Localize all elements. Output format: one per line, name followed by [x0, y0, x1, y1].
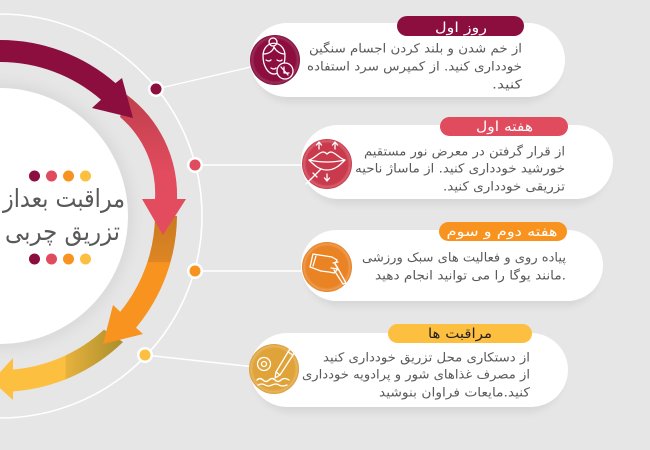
text block: از دستکاری محل تزریق خودداری کنید — [323, 350, 530, 366]
text block — [302, 350, 530, 400]
ring node: red — [187, 157, 203, 173]
icon: pen and eye — [249, 344, 299, 394]
outer ring — [0, 14, 202, 418]
panel: first day — [250, 16, 565, 102]
text block: از قرار گرفتن در معرض نور مستقیم — [364, 144, 565, 160]
ring node: orange — [187, 263, 203, 279]
text block — [355, 144, 566, 194]
heading pill — [439, 222, 567, 241]
panel: first week — [301, 117, 613, 204]
title: مراقبت بعداز — [1, 184, 125, 213]
title: تزریق چربی — [5, 217, 120, 246]
panel: care — [249, 324, 568, 412]
heading pill: هفته دوم و سوم — [446, 224, 558, 240]
heading pill: مراقبت ها — [428, 326, 492, 342]
text block: .مانند یوگا را می توانید انجام دهید — [375, 268, 566, 284]
text block: خورشید خودداری کنید. از ماساژ ناحیه — [355, 160, 565, 176]
text block: پیاده روی و فعالیت های سبک ورزشی — [362, 250, 567, 266]
text block: خودداری کنید. از کمپرس سرد استفاده — [307, 58, 522, 74]
title — [1, 184, 125, 246]
panel: second and third week — [301, 222, 603, 306]
icon: hand with syringe — [302, 242, 352, 292]
top dots — [29, 170, 91, 182]
text block: کنید.مایعات فراوان بنوشید — [379, 384, 530, 400]
centre circle shadow — [0, 85, 131, 347]
text block — [362, 250, 567, 284]
icon: face — [250, 35, 300, 85]
text block — [307, 40, 522, 92]
arrow: yellow — [0, 330, 123, 400]
heading pill — [440, 117, 568, 136]
card — [301, 125, 613, 199]
text block: کنید. — [492, 76, 522, 92]
card — [250, 23, 565, 97]
heading pill: هفته اول — [476, 119, 533, 135]
ring node: yellow — [137, 347, 153, 363]
connector lines — [145, 66, 305, 367]
bottom dots — [29, 254, 91, 264]
heading pill — [397, 16, 524, 36]
text block: تزریقی خودداری کنید. — [443, 178, 566, 194]
card — [301, 230, 603, 301]
text block: از خم شدن و بلند کردن اجسام سنگین — [309, 40, 522, 56]
arrow: orange — [103, 216, 177, 344]
icon: lips — [302, 139, 352, 189]
arrow: maroon — [0, 40, 133, 118]
ring node: maroon — [148, 81, 164, 97]
heading pill — [388, 324, 532, 343]
card — [250, 333, 568, 407]
heading pill: روز اول — [435, 20, 487, 36]
arrow: red — [120, 95, 186, 235]
text block: از مصرف غذاهای شور و پرادویه خودداری — [302, 366, 530, 382]
centre white circle — [0, 88, 128, 344]
